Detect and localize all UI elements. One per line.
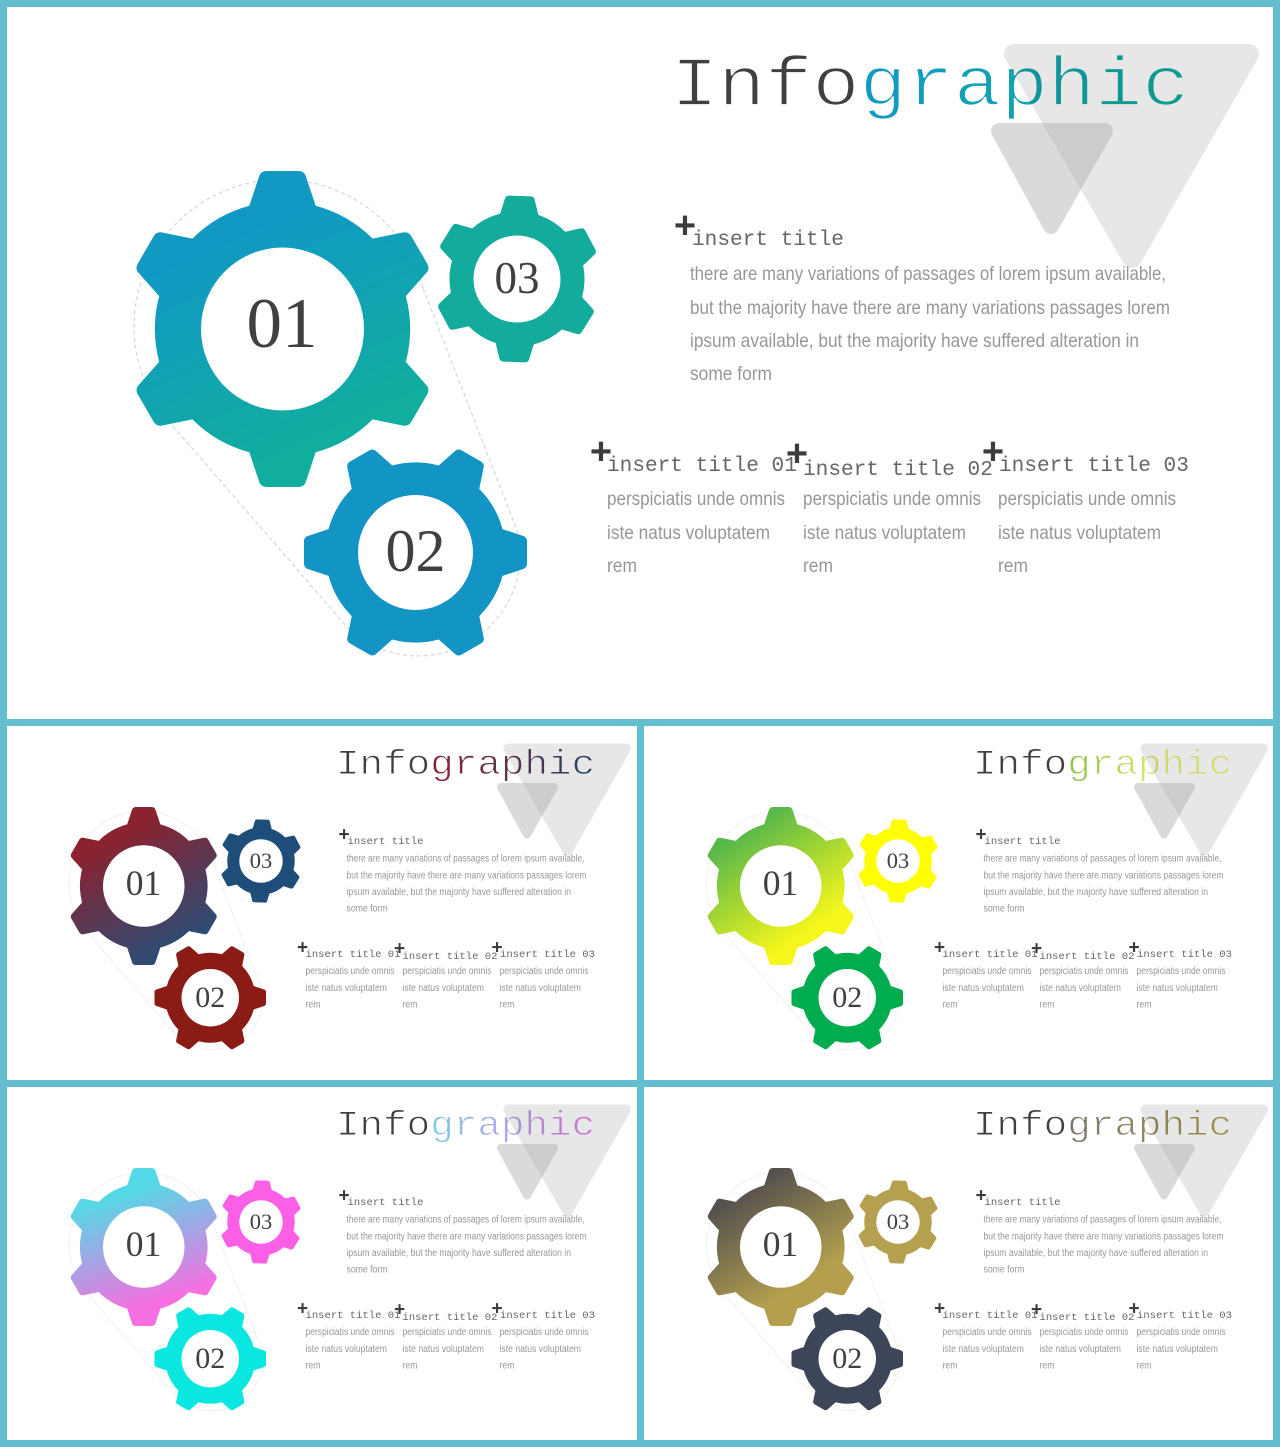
text block: insert title: ipsum available, but the majority have suffered alteration in [346,887,571,898]
text block: insert title 01: perspiciatis unde omnis [306,1327,395,1338]
text block: insert title 01: perspiciatis unde omnis [942,966,1032,977]
text block: insert title 02: + [786,433,808,475]
text block: insert title 01: rem [306,1360,320,1372]
text block: insert title 03: + [1128,1298,1140,1320]
gear 01 [708,1168,854,1326]
text block: insert title 02 [394,938,497,1010]
text block: insert title 03: perspiciatis unde omnis [1136,966,1226,977]
gear 01: 01 [763,863,798,903]
text block: insert title: insert title [692,228,844,252]
text block: insert title 02: iste natus voluptatem [402,983,484,994]
text block: insert title 01: + [297,1298,308,1320]
text block: insert title [338,824,586,914]
text block: insert title 01 [934,938,1037,1010]
gear 02: 02 [832,981,862,1014]
text block: insert title: there are many variations of passages of lorem ipsum available, [346,1214,584,1226]
triangles [1138,1110,1263,1212]
text block: insert title 01 [934,1298,1037,1372]
gear 03 [858,818,938,904]
outline around gears [70,1172,263,1410]
text block: insert title 02 [394,1300,497,1372]
text block: insert title: there are many variations of passages of lorem ipsum available, [984,854,1222,864]
text block: insert title 03: rem [1136,1360,1152,1372]
text block: insert title 02: perspiciatis unde omnis [1040,1327,1129,1338]
text block: insert title 02: perspiciatis unde omnis [803,488,981,510]
text block: insert title 03: insert title 03 [999,454,1189,478]
text block: insert title: some form [690,363,772,385]
text block: insert title 02: iste natus voluptatem [803,522,966,544]
gear 01: 01 [126,863,161,903]
text block: insert title 03 [1128,1298,1232,1372]
text block: insert title: but the majority have there are many variations passages lorem [690,297,1170,319]
text block: insert title 01: insert title 01 [306,1310,400,1322]
text block: insert title 01: + [934,938,945,958]
text block: insert title 01: iste natus voluptatem [942,983,1024,994]
gear 03: 03 [250,1209,272,1234]
text block: insert title 02 [1031,1300,1134,1372]
gear 03: 03 [494,253,540,303]
text block: insert title 02: + [1031,1300,1042,1320]
panel: main teal and blue infographic slide [7,7,1273,719]
text block: insert title 03: insert title 03 [1137,949,1232,961]
text block: insert title 01: perspiciatis unde omnis [942,1327,1032,1338]
text block: insert title 03: + [491,1298,503,1320]
gear 03: 03 [887,1209,909,1234]
gear 01: 01 [126,1224,161,1264]
gear 02 [775,924,920,1072]
text block: insert title 02: insert title 02 [1040,951,1134,963]
gear 01: 01 [763,1224,798,1264]
text block: insert title 02: perspiciatis unde omnis [402,966,492,977]
text block: insert title: there are many variations of passages of lorem ipsum available, [690,263,1166,285]
text block: insert title 03 [491,1298,595,1372]
text block: insert title: ipsum available, but the majority have suffered alteration in [984,887,1208,898]
text block: insert title 03 [491,938,595,1010]
text block: insert title: some form [984,904,1024,914]
dashed outline around gears [134,180,520,656]
text block: insert title: + [975,1186,987,1206]
text block: insert title 03: perspiciatis unde omnis [1136,1327,1226,1338]
text block: insert title 03: perspiciatis unde omnis [998,488,1176,510]
text block: insert title 02: iste natus voluptatem [402,1344,484,1355]
text block: insert title 03: rem [500,1360,514,1372]
text block: insert title: ipsum available, but the majority have suffered alteration in [690,330,1139,352]
text block: insert title 02: rem [1040,1000,1054,1010]
text block: insert title 01: + [297,938,308,958]
text block: insert title: some form [984,1264,1024,1276]
text block: insert title 01: iste natus voluptatem [942,1344,1024,1355]
text block: insert title 02: perspiciatis unde omnis [1040,966,1129,977]
text block: insert title: insert title [348,836,423,848]
text block: insert title 03: insert title 03 [500,949,595,961]
text block: insert title: + [338,824,350,846]
text block: insert title 03: iste natus voluptatem [1136,983,1218,994]
gear 01 [708,807,854,965]
gear 03 [858,1179,938,1265]
gear 02 [775,1285,920,1433]
gear 03: 03 [887,848,909,873]
triangles [1138,748,1263,850]
gear 01: 01 [246,285,318,363]
gear 02: 02 [195,981,225,1014]
text block: insert title: + [338,1186,350,1206]
text block: insert title: but the majority have there are many variations passages lorem [984,870,1224,882]
title: Infographic [336,1107,595,1146]
text block: insert title 01: rem [942,1000,958,1010]
gear 02: 02 [832,1342,862,1375]
text block: insert title 02: rem [402,1000,418,1010]
text block: insert title 03: rem [998,555,1028,577]
gear 01 [136,171,429,487]
text block: insert title: but the majority have there are many variations passages lorem [346,870,586,882]
triangles [501,748,626,850]
gear 03: 03 [250,848,272,873]
text block: insert title 03: + [982,431,1004,473]
text block: insert title 03: rem [500,1000,514,1010]
text block: insert title 02: iste natus voluptatem [1040,983,1121,994]
panel: green and yellow variant [644,726,1273,1080]
text block: insert title 01: rem [607,555,637,577]
text block: insert title: + [674,205,696,247]
text block: insert title: but the majority have there are many variations passages lorem [346,1232,586,1242]
text block: insert title 02: insert title 02 [1040,1312,1134,1324]
text block: insert title 01: insert title 01 [306,949,400,961]
text block: insert title 02: rem [402,1360,418,1372]
text block: insert title 01: perspiciatis unde omnis [607,488,785,510]
text block: insert title 03: iste natus voluptatem [998,522,1161,544]
text block: insert title 02 [786,433,993,577]
text block: insert title: insert title [984,1197,1060,1209]
text block: insert title 03: + [1128,938,1140,958]
title: Infographic [973,1107,1232,1146]
text block: insert title 02: + [394,938,405,960]
text block: insert title 01: perspiciatis unde omnis [306,966,395,977]
text block: insert title 03: rem [1136,1000,1152,1010]
panel: cyan and pink variant [7,1087,637,1440]
outline around gears [707,811,900,1049]
text block: insert title 03: perspiciatis unde omnis [500,966,589,977]
text block: insert title: ipsum available, but the majority have suffered alteration in [346,1248,571,1259]
text block: insert title 01: rem [942,1360,958,1372]
text block: insert title 02: insert title 02 [803,458,993,482]
text block: insert title 03 [1128,938,1232,1010]
text block: insert title 01: iste natus voluptatem [306,1344,387,1355]
text block: insert title: ipsum available, but the majority have suffered alteration in [984,1248,1208,1259]
text block: insert title 03: iste natus voluptatem [1136,1344,1218,1355]
text block: insert title 03: iste natus voluptatem [500,1344,581,1355]
gear 02 [138,924,283,1072]
text block: insert title 02: + [394,1300,405,1320]
text block: insert title 02: perspiciatis unde omnis [402,1327,492,1338]
text block: insert title 01: insert title 01 [607,454,797,478]
text block: insert title 01: iste natus voluptatem [306,983,387,994]
text block: insert title 03: perspiciatis unde omnis [500,1327,589,1338]
text block: insert title 02: iste natus voluptatem [1040,1344,1121,1355]
text block: insert title [674,205,1170,385]
gear 03 [436,193,598,365]
outline around gears [70,811,263,1049]
text block: insert title 01 [297,938,400,1010]
gear 03 [221,1179,301,1265]
text block: insert title 01: insert title 01 [942,949,1037,961]
panel: olive and slate variant [644,1087,1273,1440]
text block: insert title 01 [297,1298,400,1372]
text block: insert title 02: insert title 02 [402,1312,497,1324]
text block: insert title 01 [590,431,797,577]
text block: insert title: insert title [348,1197,423,1209]
text block: insert title 03 [982,431,1189,577]
text block: insert title: there are many variations of passages of lorem ipsum available, [346,854,584,864]
text block: insert title 02: rem [1040,1360,1054,1372]
outline around gears [707,1172,900,1410]
title: Infographic [973,746,1232,785]
text block: insert title 03: insert title 03 [1137,1310,1232,1322]
text block: insert title: insert title [984,836,1060,848]
text block: insert title: + [975,824,987,846]
panel: red and navy variant [7,726,637,1080]
text block: insert title: some form [346,904,388,914]
text block: insert title 03: + [491,938,503,958]
text block: insert title [338,1186,586,1276]
text block: insert title 01: + [934,1298,945,1320]
text block: insert title: there are many variations of passages of lorem ipsum available, [984,1214,1222,1226]
gear 02 [271,404,560,701]
text block: insert title 01: iste natus voluptatem [607,522,770,544]
text block: insert title: but the majority have there are many variations passages lorem [984,1232,1224,1242]
text block: insert title 02: + [1031,938,1042,960]
title: Infographic [671,48,1189,127]
gear 02: 02 [195,1342,225,1375]
text block: insert title [975,1186,1224,1276]
title: Infographic [336,746,595,785]
text block: insert title 02: insert title 02 [402,951,497,963]
gear 03 [221,818,301,904]
text block: insert title 01: rem [306,1000,320,1010]
text block: insert title 01: + [590,431,612,473]
text block: insert title 01: insert title 01 [942,1310,1037,1322]
gear 02: 02 [386,518,446,584]
text block: insert title 03: insert title 03 [500,1310,595,1322]
triangles [501,1110,626,1212]
gear 01 [71,807,217,965]
text block: insert title 03: iste natus voluptatem [500,983,581,994]
text block: insert title 02 [1031,938,1134,1010]
decorative overlapping triangles [999,54,1249,258]
text block: insert title 02: rem [803,555,833,577]
gear 02 [138,1285,283,1433]
gear 01 [71,1168,217,1326]
text block: insert title [975,824,1224,914]
text block: insert title: some form [346,1264,388,1276]
